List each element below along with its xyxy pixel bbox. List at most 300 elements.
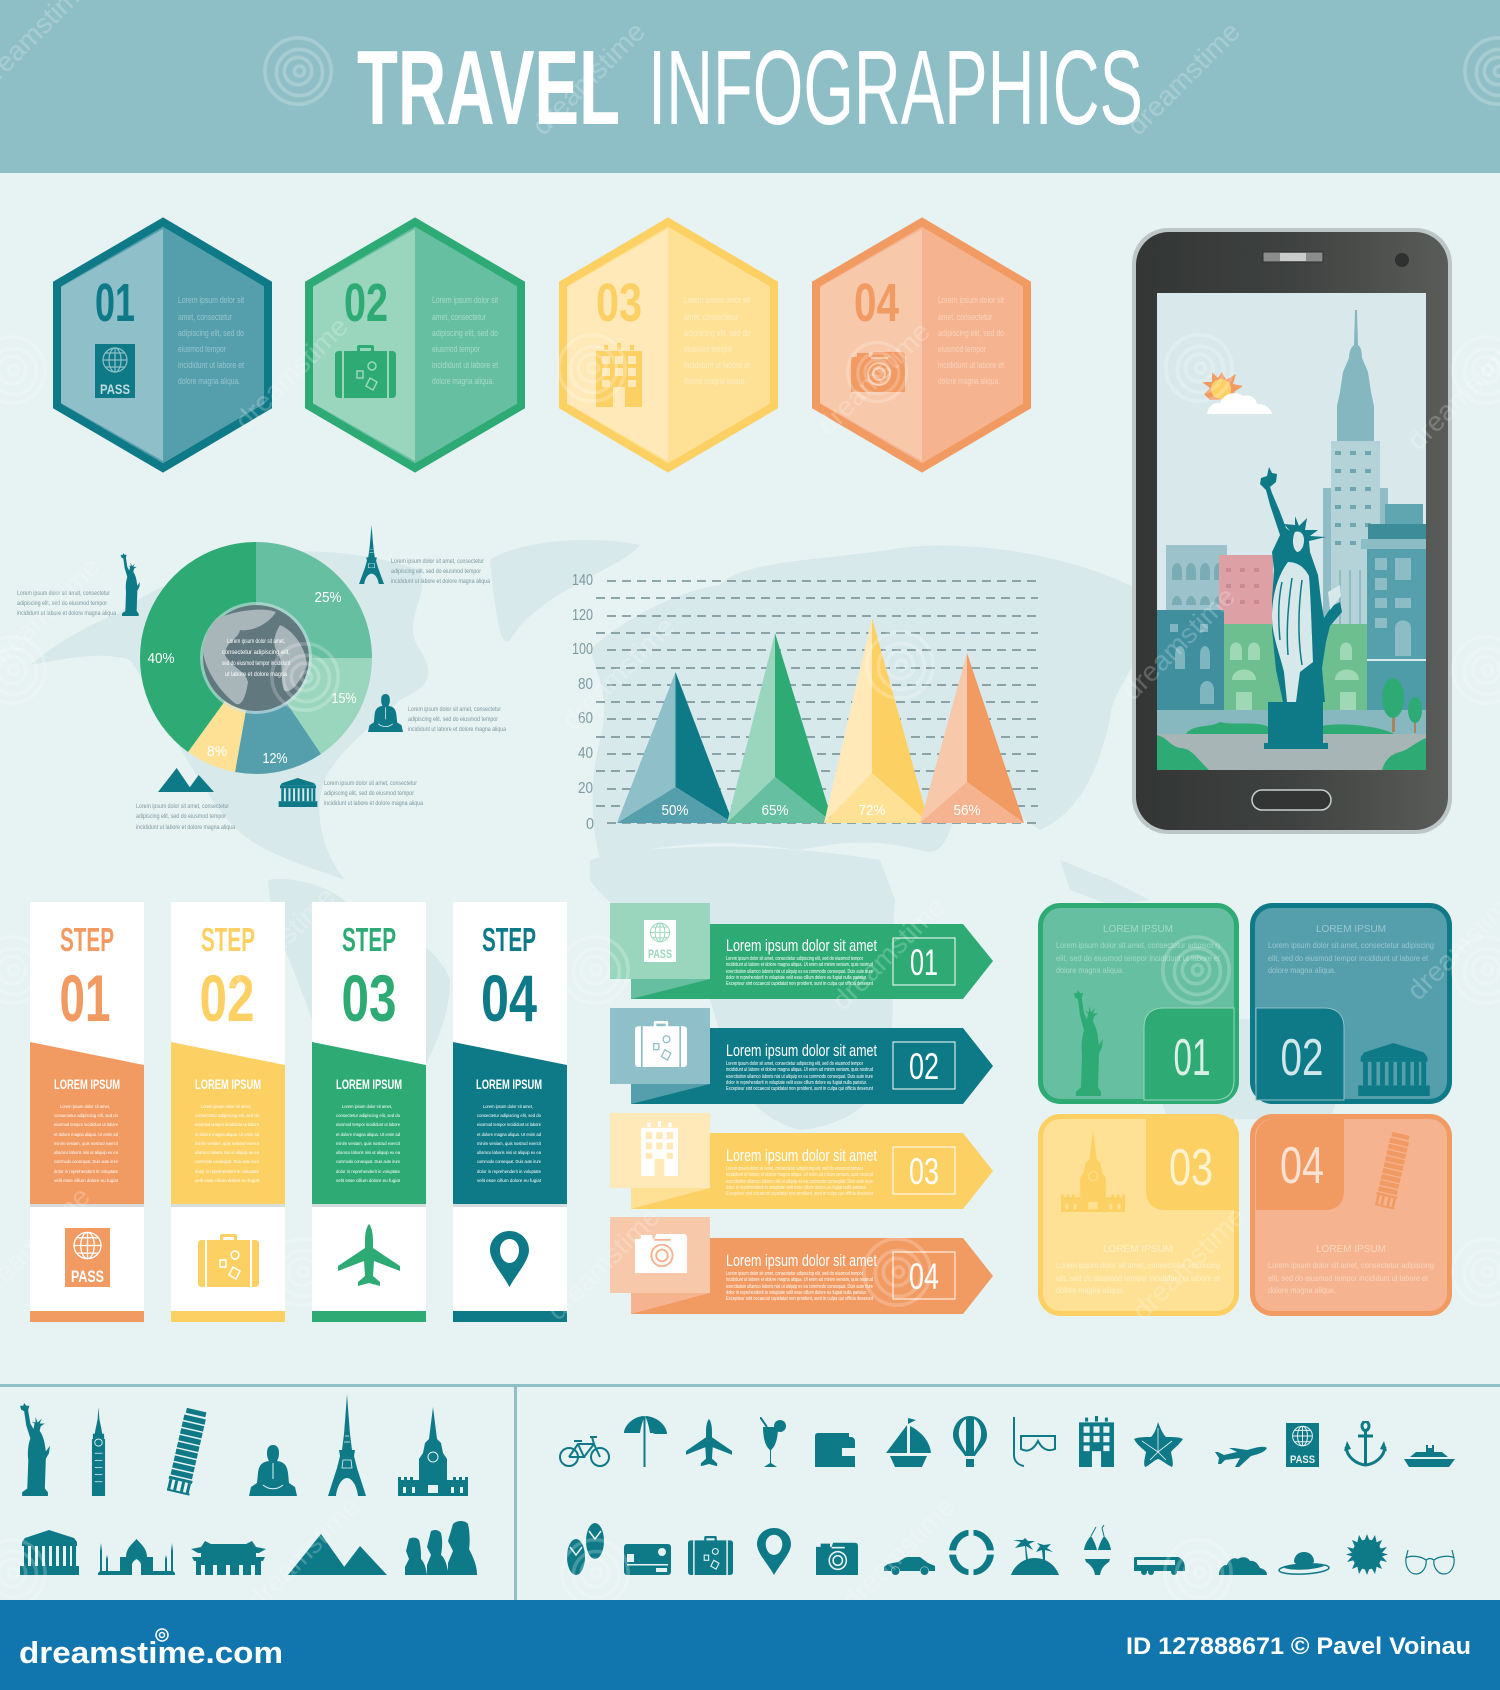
landmark icons [20, 1394, 477, 1575]
banner text: Excepteur sint occaecat cupidatat non proident, sunt in culpa qui officia deserunt [726, 1296, 874, 1302]
triangle 50% [617, 672, 733, 823]
callout texts: incididunt ut labore et dolore magna aliqua [17, 610, 116, 617]
step heading and text: ullamco laboris nisi ut aliquip ex ea [336, 1150, 400, 1155]
step heading and text: eiusmod tempor incididunt ut labore [195, 1122, 259, 1127]
card text: LOREM IPSUM [1316, 1243, 1386, 1255]
step heading and text: consectetur adipiscing elit, sed do [477, 1113, 541, 1118]
watermark overlay: dreamstime [826, 891, 951, 1016]
chart axis labels: 140 [572, 572, 593, 589]
hexagon 02 text: eiusmod tempor [432, 344, 480, 354]
header band [0, 0, 1500, 173]
step number: 04 [481, 961, 537, 1035]
globe centre [200, 602, 312, 714]
icon: cloud [1219, 1557, 1267, 1575]
title [357, 29, 1143, 147]
icon: kremlin tower [1061, 1130, 1125, 1212]
card text: elit, sed do eiusmod tempor incididunt ut labore et [1056, 1273, 1221, 1283]
hexagon 03 text: dolore magna aliqua. [684, 376, 746, 386]
step label: STEP [201, 921, 255, 958]
banner text: dolor in reprehenderit in voluptate velit esse cillum dolore eu fugiat nulla pariatur. [726, 1185, 867, 1191]
hexagon 03 text: eiusmod tempor [684, 344, 732, 354]
step heading and text: ullamco laboris nisi ut aliquip ex ea [54, 1150, 118, 1155]
statue robe [1272, 562, 1313, 702]
step heading and text: Lorem ipsum dolor sit amet, [201, 1104, 251, 1109]
card number: 02 [1280, 1029, 1324, 1087]
title: TRAVEL [357, 29, 620, 147]
step heading and text: et dolore magna aliqua. Ut enim ad [54, 1132, 118, 1137]
step heading and text: commodo consequat. Duis aute irure [336, 1159, 400, 1164]
card number: 01 [1174, 1029, 1210, 1087]
donut percent labels: 8% [207, 743, 227, 760]
card text: LOREM IPSUM [1103, 923, 1173, 935]
ground strip [1157, 710, 1426, 734]
square card 04 [1252, 1116, 1450, 1314]
chart gridlines [596, 581, 1038, 823]
icon: wallet [815, 1433, 855, 1467]
step heading and text [195, 1076, 261, 1183]
hexagon 03 text: adipiscing elit, sed do [684, 328, 750, 338]
statue folds [1279, 578, 1302, 665]
callout texts: Lorem ipsum dolor sit amet, consectetur [17, 590, 111, 597]
card text: LOREM IPSUM [1103, 1243, 1173, 1255]
callout texts: incididunt ut labore et dolore magna aliqua [391, 578, 490, 585]
icon: location pin [490, 1231, 529, 1287]
step number: 02 [200, 961, 254, 1035]
hexagon 02 panel [309, 222, 521, 468]
watermark overlay: dreamstime [1126, 1201, 1251, 1326]
icon: credit card [624, 1544, 671, 1575]
step heading and text: minim veniam, quis nostrud exercit [195, 1141, 260, 1146]
icon: bikini [1084, 1525, 1111, 1575]
watermark overlay: dreamstime [241, 1491, 366, 1616]
icon: moai statues [405, 1521, 477, 1575]
hexagon 02 text: Lorem ipsum dolor sit [432, 295, 498, 305]
step heading and text: velit esse cillum dolore eu fugiat [54, 1178, 119, 1183]
icon: statue of liberty [20, 1403, 50, 1496]
icon: passport: PASS [648, 947, 672, 961]
icon: passport: PASS [71, 1267, 104, 1286]
step heading and text: minim veniam, quis nostrud exercit [477, 1141, 542, 1146]
banner number box [893, 1252, 955, 1299]
hexagon 04 text: amet, consectetur [938, 312, 992, 322]
hexagon 03 panel [563, 222, 774, 468]
step heading and text: LOREM IPSUM [195, 1076, 261, 1092]
banner text: Excepteur sint occaecat cupidatat non proident, sunt in culpa qui officia deserunt [726, 981, 874, 987]
icon: chinese palace [191, 1541, 266, 1575]
travel icons [560, 1416, 1455, 1575]
icon: snorkel mask [1014, 1417, 1055, 1466]
hexagon 01 text: amet, consectetur [178, 312, 232, 322]
card text: dolore magna aliqua. [1056, 1285, 1124, 1295]
icon: starfish [1134, 1422, 1183, 1467]
step heading and text: dolor in reprehenderit in voluptate [477, 1169, 541, 1174]
square card 02 [1252, 906, 1450, 1102]
banner text: dolor in reprehenderit in voluptate velit esse cillum dolore eu fugiat nulla pariatur. [726, 975, 867, 981]
icon: glasses [1406, 1550, 1454, 1574]
step heading and text: commodo consequat. Duis aute irure [54, 1159, 118, 1164]
icon: sun hat [1279, 1552, 1329, 1575]
icon: hotel [596, 343, 642, 407]
step heading and text: eiusmod tempor incididunt ut labore [477, 1122, 541, 1127]
icon: suitcase [688, 1536, 733, 1575]
trees [1382, 678, 1422, 733]
segment 15% [286, 658, 372, 754]
icon: flip flops [567, 1523, 604, 1575]
card text [1268, 1243, 1434, 1295]
icon: airplane side [1215, 1447, 1267, 1467]
hexagon 02 text: adipiscing elit, sed do [432, 328, 498, 338]
hexagon 04 text: adipiscing elit, sed do [938, 328, 1004, 338]
triangle 50%: 50% [662, 802, 688, 819]
watermark overlay: dreamstime [526, 16, 651, 141]
card text [1056, 1243, 1221, 1295]
callout texts: incididunt ut labore et dolore magna aliqua [408, 726, 506, 733]
icon: parthenon small [279, 778, 317, 807]
triangle 65%: 65% [762, 802, 788, 819]
banner number box: 02 [909, 1046, 939, 1087]
icon: pyramids small [158, 768, 214, 792]
icon: passport [95, 344, 135, 398]
banner heading: Lorem ipsum dolor sit amet [726, 1041, 877, 1060]
hexagon 03 text: incididunt ut labore et [684, 360, 750, 370]
banner text [726, 956, 874, 987]
road [1157, 734, 1426, 770]
icon: passport: PASS [100, 381, 130, 397]
watermark overlay: dreamstime [229, 311, 354, 436]
banner number box [893, 938, 955, 985]
triangle 56%: 56% [954, 802, 980, 819]
step column 01 [30, 902, 144, 1322]
triangle 72% [824, 618, 929, 823]
step column 02 [171, 902, 285, 1322]
step heading and text [54, 1076, 120, 1183]
icon: beach umbrella [624, 1416, 667, 1467]
hexagon 04 text: incididunt ut labore et [938, 360, 1004, 370]
card text: Lorem ipsum dolor sit amet, consectetur adipiscing [1268, 940, 1434, 950]
donut percent labels [148, 589, 356, 767]
step heading and text: minim veniam, quis nostrud exercit [336, 1141, 401, 1146]
hexagon 01 text: incididunt ut labore et [178, 360, 244, 370]
step label: STEP [60, 921, 114, 958]
sun and cloud [1202, 372, 1272, 414]
watermark overlay: dreamstime [541, 1201, 666, 1326]
chart axis labels: 100 [572, 641, 593, 658]
hexagon 02 text: dolore magna aliqua. [432, 376, 494, 386]
step heading and text [476, 1076, 542, 1183]
globe centre: consectetur adipiscing elit, [222, 650, 290, 656]
card text [1056, 923, 1221, 975]
banner text: Lorem ipsum dolor sit amet, consectetur adipiscing elit, sed do eiusmod tempor [726, 1271, 863, 1277]
callout texts: adipiscing elit, sed do eiusmod tempor [391, 568, 482, 575]
step heading and text: LOREM IPSUM [476, 1076, 542, 1092]
icon: camera [851, 352, 905, 392]
icon: palm island [1011, 1538, 1059, 1575]
callout texts: adipiscing elit, sed do eiusmod tempor [136, 813, 227, 820]
banner text: incididunt ut labore et dolore magna aliqua. Ut enim ad minim veniam, quis nostrud [726, 1277, 873, 1283]
icon: passport [65, 1228, 110, 1287]
icon: camera [635, 1234, 687, 1273]
card text: elit, sed do eiusmod tempor incididunt ut labore et [1056, 953, 1221, 963]
icon: pyramids [288, 1534, 387, 1575]
hexagon 02 text [432, 295, 498, 386]
footer bar [0, 1600, 1500, 1690]
step label: STEP [482, 921, 536, 958]
step heading and text: dolor in reprehenderit in voluptate [336, 1169, 400, 1174]
step heading and text [336, 1076, 402, 1183]
step heading and text: Lorem ipsum dolor sit amet, [60, 1104, 110, 1109]
step heading and text: velit esse cillum dolore eu fugiat [477, 1178, 542, 1183]
banner text: Excepteur sint occaecat cupidatat non proident, sunt in culpa qui officia deserunt [726, 1086, 874, 1092]
callout texts: Lorem ipsum dolor sit amet, consectetur [324, 780, 418, 787]
icon: passport: PASS [1290, 1454, 1315, 1466]
step heading and text: commodo consequat. Duis aute irure [195, 1159, 259, 1164]
hexagon 02 text: incididunt ut labore et [432, 360, 498, 370]
card text: dolore magna aliqua. [1268, 1285, 1336, 1295]
banner text: incididunt ut labore et dolore magna aliqua. Ut enim ad minim veniam, quis nostrud [726, 1172, 873, 1178]
hexagon 02 text: amet, consectetur [432, 312, 486, 322]
icon: buddha small [368, 694, 403, 732]
hexagon 01 text: Lorem ipsum dolor sit [178, 295, 244, 305]
phone screen: city scene [1157, 293, 1426, 770]
square card 01 [1040, 906, 1236, 1102]
banner number box: 03 [909, 1151, 939, 1192]
hexagon 04 text [938, 295, 1004, 386]
callout texts: adipiscing elit, sed do eiusmod tempor [408, 716, 499, 723]
step number: 01 [60, 961, 110, 1035]
triangle 56% [920, 653, 1024, 823]
icon: suitcase [198, 1234, 259, 1287]
banner text: exercitation ullamco laboris nisi ut aliquip ex ea commodo consequat. Duis aute irure [726, 969, 873, 975]
step heading and text: et dolore magna aliqua. Ut enim ad [336, 1132, 400, 1137]
step heading and text: et dolore magna aliqua. Ut enim ad [195, 1132, 259, 1137]
hexagon 03 text [684, 295, 750, 386]
hexagon 01 text: adipiscing elit, sed do [178, 328, 244, 338]
callout texts [17, 558, 506, 831]
arrow banner 01 [610, 903, 993, 999]
callout texts: adipiscing elit, sed do eiusmod tempor [324, 790, 415, 797]
banner text: dolor in reprehenderit in voluptate velit esse cillum dolore eu fugiat nulla pariatur. [726, 1080, 867, 1086]
icon: bus [1134, 1557, 1185, 1575]
segment 40% [140, 542, 256, 752]
banner text: Lorem ipsum dolor sit amet, consectetur adipiscing elit, sed do eiusmod tempor [726, 1061, 863, 1067]
banner text [726, 1061, 874, 1092]
donut callouts with landmarks [17, 525, 506, 831]
icon: bicycle [560, 1437, 609, 1466]
globe centre: ut labore et dolore magna [225, 672, 288, 678]
step heading and text: consectetur adipiscing elit, sed do [54, 1113, 118, 1118]
step heading and text: LOREM IPSUM [336, 1076, 402, 1092]
triangle 65% [727, 633, 833, 823]
step heading and text: Lorem ipsum dolor sit amet, [342, 1104, 392, 1109]
donut percent labels: 12% [262, 750, 288, 767]
central green building [1224, 624, 1367, 710]
donut percent labels: 25% [314, 589, 342, 606]
icon: buddha [249, 1445, 297, 1496]
segment 12% [235, 702, 321, 774]
step heading and text: consectetur adipiscing elit, sed do [195, 1113, 259, 1118]
segment 8% [188, 701, 246, 772]
callout texts: incididunt ut labore et dolore magna aliqua [136, 824, 235, 831]
step heading and text: dolor in reprehenderit in voluptate [195, 1169, 259, 1174]
card tab [1146, 1119, 1234, 1210]
card text: Lorem ipsum dolor sit amet, consectetur adipiscing [1056, 1260, 1220, 1270]
icon: statue of liberty small [121, 553, 140, 616]
banner text: Excepteur sint occaecat cupidatat non proident, sunt in culpa qui officia deserunt [726, 1191, 874, 1197]
icon: cruise ship [1404, 1445, 1455, 1467]
step heading and text: Lorem ipsum dolor sit amet, [483, 1104, 533, 1109]
card text: elit, sed do eiusmod tempor incididunt ut labore et [1268, 953, 1429, 963]
step heading and text: minim veniam, quis nostrud exercit [54, 1141, 119, 1146]
step heading and text: eiusmod tempor incididunt ut labore [54, 1122, 118, 1127]
callout texts: Lorem ipsum dolor sit amet, consectetur [408, 706, 502, 713]
chart axis labels: 80 [578, 676, 593, 693]
triangle 72%: 72% [858, 802, 886, 819]
card number: 03 [1169, 1139, 1213, 1197]
banner text: exercitation ullamco laboris nisi ut aliquip ex ea commodo consequat. Duis aute irure [726, 1284, 873, 1290]
watermark overlay: dreamstime [1121, 16, 1246, 141]
banner text: exercitation ullamco laboris nisi ut aliquip ex ea commodo consequat. Duis aute irure [726, 1074, 873, 1080]
icon: hotel [641, 1121, 678, 1176]
step column 04 [453, 902, 567, 1322]
donut percent labels: 40% [148, 650, 174, 667]
step heading and text: eiusmod tempor incididunt ut labore [336, 1122, 400, 1127]
icon: passport [644, 920, 676, 962]
icon panel dividers [0, 1384, 1500, 1600]
card text: Lorem ipsum dolor sit amet, consectetur adipiscing [1056, 940, 1220, 950]
watermark overlay: dreamstime [1116, 581, 1241, 706]
icon: leaning tower [1374, 1131, 1411, 1210]
statue face and tablet [1293, 531, 1304, 552]
watermark overlay: dreamstime [811, 316, 936, 441]
card tab [1256, 1008, 1344, 1100]
step heading and text: et dolore magna aliqua. Ut enim ad [477, 1132, 541, 1137]
step heading and text: ullamco laboris nisi ut aliquip ex ea [477, 1150, 541, 1155]
card tab [1256, 1119, 1344, 1210]
callout texts: incididunt ut labore et dolore magna aliqua [324, 800, 423, 807]
step heading and text: dolor in reprehenderit in voluptate [54, 1169, 118, 1174]
globe centre: Lorem ipsum dolor sit amet, [227, 639, 285, 645]
hexagon 01 panel [57, 222, 268, 468]
hexagon 04 text: Lorem ipsum dolor sit [938, 295, 1004, 305]
callout texts: Lorem ipsum dolor sit amet, consectetur [136, 803, 230, 810]
icon: camera [816, 1543, 858, 1575]
icon: plane [686, 1419, 732, 1466]
watermark overlay: dreamstime [836, 1491, 961, 1616]
back-left arched building [1166, 545, 1227, 611]
hexagon 03 number: 03 [596, 273, 642, 333]
chart axis labels [572, 572, 594, 833]
icon: passport [1286, 1423, 1319, 1467]
chart axis labels: 120 [572, 607, 593, 624]
banner heading: Lorem ipsum dolor sit amet [726, 936, 877, 955]
step heading and text: velit esse cillum dolore eu fugiat [195, 1178, 260, 1183]
card text: LOREM IPSUM [1316, 923, 1386, 935]
banner text: dolor in reprehenderit in voluptate velit esse cillum dolore eu fugiat nulla pariatur. [726, 1290, 867, 1296]
arrow banner 04 [610, 1217, 993, 1314]
icon: eiffel tower small [359, 525, 384, 584]
icon: location pin [757, 1528, 791, 1575]
step heading and text: consectetur adipiscing elit, sed do [336, 1113, 400, 1118]
hexagon 01 number: 01 [95, 273, 135, 333]
title: INFOGRAPHICS [648, 29, 1143, 147]
banner text: incididunt ut labore et dolore magna aliqua. Ut enim ad minim veniam, quis nostrud [726, 1067, 873, 1073]
logo spiral [156, 1629, 168, 1641]
chart axis labels: 60 [578, 710, 593, 727]
hexagon 02 number: 02 [344, 273, 388, 333]
hexagon 04 panel [816, 222, 1027, 468]
icon: hot air balloon [953, 1416, 987, 1467]
footer logo: dreamstime.com [19, 1635, 283, 1670]
icon: sailboat [886, 1418, 931, 1467]
hexagon 03 text: amet, consectetur [684, 312, 738, 322]
skyscraper [1323, 310, 1388, 624]
banner text: incididunt ut labore et dolore magna aliqua. Ut enim ad minim veniam, quis nostrud [726, 962, 873, 968]
icon: eiffel tower [328, 1394, 366, 1496]
pink building [1219, 555, 1273, 624]
step heading and text: velit esse cillum dolore eu fugiat [336, 1178, 401, 1183]
square card 03 [1040, 1116, 1236, 1314]
banner text [726, 1271, 874, 1302]
watermark overlay: dreamstime [216, 881, 341, 1006]
icon: big ben [92, 1407, 105, 1496]
step number: 03 [342, 961, 396, 1035]
hexagon 04 text: dolore magna aliqua. [938, 376, 1000, 386]
card text [1268, 923, 1434, 975]
icon: life buoy [949, 1530, 994, 1575]
icon: car [884, 1557, 935, 1575]
phone [1132, 228, 1452, 834]
icon: parthenon [20, 1530, 79, 1575]
statue of liberty [1260, 467, 1342, 749]
card text: dolore magna aliqua. [1056, 965, 1124, 975]
step heading and text: ullamco laboris nisi ut aliquip ex ea [195, 1150, 259, 1155]
donut percent labels: 15% [332, 690, 356, 707]
banner heading: Lorem ipsum dolor sit amet [726, 1251, 877, 1270]
hedge and bushes [1157, 722, 1426, 770]
icon: taj mahal [98, 1539, 175, 1575]
icon: parthenon [1358, 1043, 1430, 1096]
triangle chart [572, 572, 1038, 833]
icon: kremlin tower [398, 1407, 468, 1496]
icon: leaning tower [166, 1407, 208, 1496]
banner text [726, 1166, 874, 1197]
icon: sun [1346, 1534, 1388, 1575]
card tab [1144, 1008, 1234, 1100]
hexagon 01 text [178, 295, 244, 386]
icon: plane [338, 1224, 400, 1286]
hexagon 01 text: dolore magna aliqua. [178, 376, 240, 386]
banner heading: Lorem ipsum dolor sit amet [726, 1146, 877, 1165]
hexagon 04 text: eiusmod tempor [938, 344, 986, 354]
icon: suitcase [335, 345, 396, 398]
globe centre: sed do eiusmod tempor incididunt [222, 661, 290, 667]
icon: anchor [1344, 1422, 1387, 1465]
world map background [30, 540, 1338, 1130]
arrow banner 03 [610, 1113, 993, 1209]
hexagon 03 text: Lorem ipsum dolor sit [684, 295, 750, 305]
arrow banner 02 [610, 1008, 993, 1104]
donut chart [140, 542, 372, 774]
icon: suitcase [635, 1021, 687, 1067]
hexagon 04 number: 04 [854, 273, 899, 333]
card text: Lorem ipsum dolor sit amet, consectetur adipiscing [1268, 1260, 1434, 1270]
chart axis labels: 40 [578, 745, 593, 762]
callout texts: adipiscing elit, sed do eiusmod tempor [17, 600, 108, 607]
step label: STEP [342, 921, 396, 958]
icon: hotel [1079, 1416, 1114, 1467]
watermark overlay: dreamstime [556, 611, 681, 736]
banner number box: 01 [910, 942, 938, 983]
